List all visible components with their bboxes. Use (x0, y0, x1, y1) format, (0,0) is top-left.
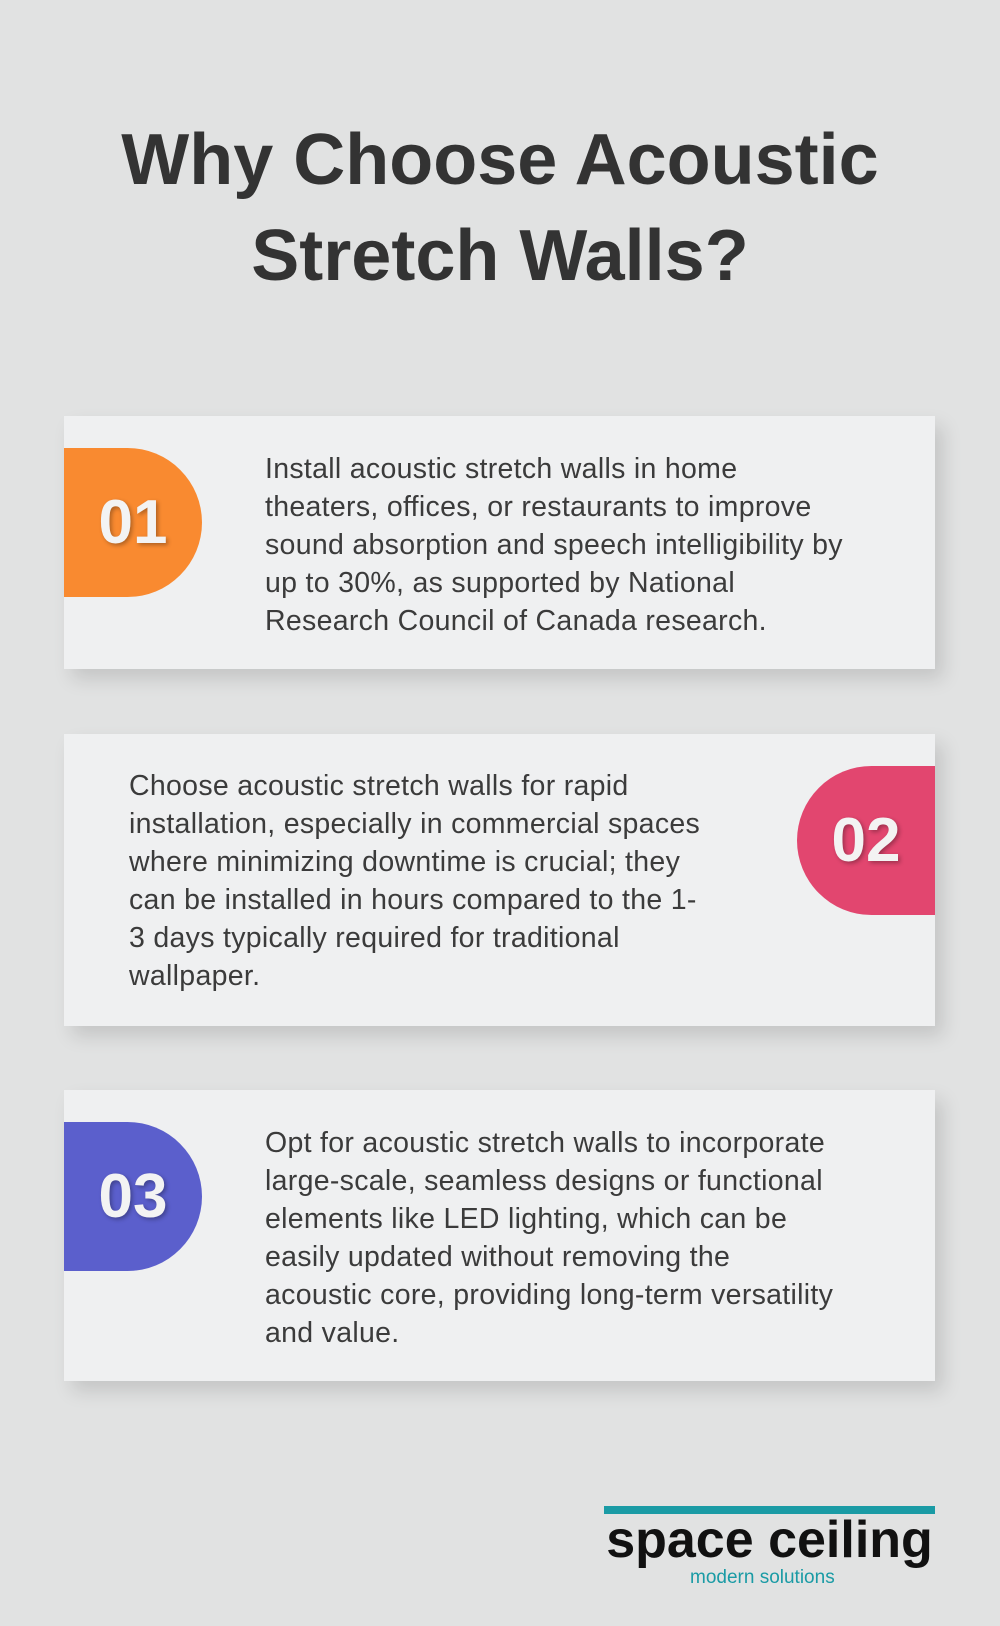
text 2: where minimizing downtime is crucial; they (129, 846, 680, 878)
panel: card 1 (64, 416, 935, 669)
badge 02: 02 (832, 806, 900, 875)
text 3: Opt for acoustic stretch walls to incorporate (265, 1127, 825, 1159)
text 1: Install acoustic stretch walls in home (265, 453, 737, 485)
badge 03: 03 (99, 1162, 167, 1231)
text 2: wallpaper. (129, 960, 260, 992)
text 1: sound absorption and speech intelligibility by (265, 529, 843, 561)
text 2 (129, 770, 700, 992)
text 2: can be installed in hours compared to the 1- (129, 884, 697, 916)
badge 01 (64, 448, 202, 597)
panel: card 3 (64, 1090, 935, 1381)
title: Stretch Walls? (251, 216, 749, 296)
panel: card 2 (64, 734, 935, 1026)
title: Why Choose Acoustic (121, 120, 879, 200)
text 3: elements like LED lighting, which can be (265, 1203, 787, 1235)
text 3: acoustic core, providing long-term versatility (265, 1279, 833, 1311)
badge 02 (797, 766, 935, 915)
text 3 (265, 1127, 833, 1349)
badge 01: 01 (99, 488, 167, 557)
text 3: and value. (265, 1317, 400, 1349)
logo: space ceiling (606, 1511, 933, 1569)
text 1: theaters, offices, or restaurants to improve (265, 491, 812, 523)
title (121, 120, 879, 296)
text 1 (265, 453, 843, 637)
text 2: installation, especially in commercial spaces (129, 808, 700, 840)
text 2: 3 days typically required for traditional (129, 922, 620, 954)
logo: modern solutions (690, 1567, 835, 1588)
badge 03 (64, 1122, 202, 1271)
text 1: Research Council of Canada research. (265, 605, 767, 637)
text 3: large-scale, seamless designs or functional (265, 1165, 823, 1197)
text 1: up to 30%, as supported by National (265, 567, 735, 599)
logo (604, 1506, 935, 1588)
text 2: Choose acoustic stretch walls for rapid (129, 770, 629, 802)
text 3: easily updated without removing the (265, 1241, 730, 1273)
